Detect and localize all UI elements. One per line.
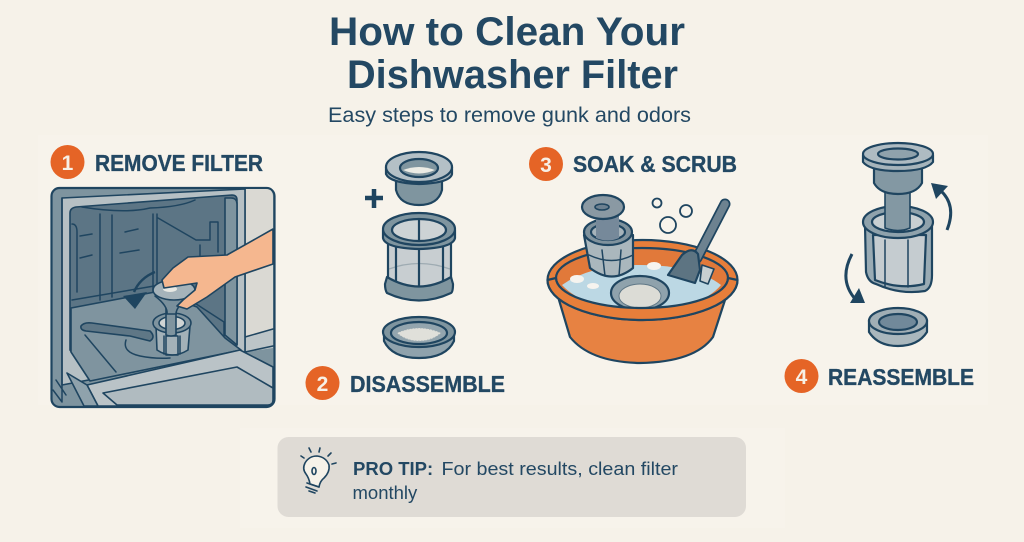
panel: disassembled filter parts bbox=[365, 152, 455, 358]
title: How to Clean Your bbox=[329, 10, 685, 54]
mesh filter part bbox=[383, 213, 455, 300]
subtitle: Easy steps to remove gunk and odors bbox=[328, 104, 691, 127]
base ring bbox=[869, 308, 927, 346]
step 3 heading: SOAK & SCRUB bbox=[573, 151, 737, 177]
hand bbox=[162, 229, 273, 309]
tip text second line: monthly bbox=[352, 482, 418, 503]
dishwasher interior bbox=[70, 195, 237, 376]
step 2 heading: DISASSEMBLE bbox=[350, 371, 505, 397]
basin front rim bbox=[548, 278, 738, 320]
foam bbox=[570, 262, 661, 289]
strainer base part bbox=[383, 317, 455, 358]
filter base in sump bbox=[153, 313, 191, 355]
step 1 heading bbox=[50, 145, 263, 179]
arrow: down bbox=[846, 254, 865, 303]
icon: plus bbox=[365, 189, 383, 208]
step 1 heading: REMOVE FILTER bbox=[95, 150, 263, 176]
dishwasher door bbox=[87, 350, 273, 406]
bubbles bbox=[652, 198, 692, 233]
dishwasher floor bbox=[71, 292, 241, 381]
water bbox=[562, 265, 721, 310]
basin body bbox=[559, 300, 725, 363]
spray arm bbox=[81, 323, 153, 341]
arrow: twist bbox=[123, 272, 155, 309]
step 2 heading: 2 bbox=[317, 373, 328, 396]
panel: reassembled filter bbox=[846, 143, 951, 346]
filter cap bbox=[153, 280, 195, 314]
stem bbox=[885, 190, 910, 230]
step 3 heading: 3 bbox=[540, 154, 552, 177]
filter cap part bbox=[386, 152, 452, 205]
brush bbox=[668, 204, 725, 283]
panel: dishwasher illustration bbox=[52, 188, 274, 407]
cage bbox=[863, 206, 933, 292]
side wall bbox=[245, 189, 273, 337]
title: Dishwasher Filter bbox=[347, 53, 678, 97]
icon: light bulb bbox=[301, 448, 336, 493]
step 3 heading bbox=[529, 147, 737, 181]
step 4 heading: 4 bbox=[796, 366, 808, 389]
step 4 heading: REASSEMBLE bbox=[828, 364, 974, 390]
step 1 heading: 1 bbox=[62, 152, 74, 175]
tip text: PRO TIP: bbox=[353, 458, 433, 479]
door frame bbox=[62, 189, 245, 385]
step 2 heading bbox=[306, 366, 505, 400]
panel: soak and scrub basin bbox=[548, 195, 738, 363]
callout: pro tip bbox=[278, 437, 746, 517]
filter soaking bbox=[582, 195, 633, 276]
sponge bbox=[700, 265, 714, 284]
tip text: For best results, clean filter bbox=[442, 458, 678, 479]
arrow: up bbox=[931, 183, 951, 230]
top cap bbox=[863, 143, 933, 194]
step 4 heading bbox=[784, 359, 974, 393]
strainer in water bbox=[611, 276, 669, 310]
title bbox=[329, 10, 685, 97]
